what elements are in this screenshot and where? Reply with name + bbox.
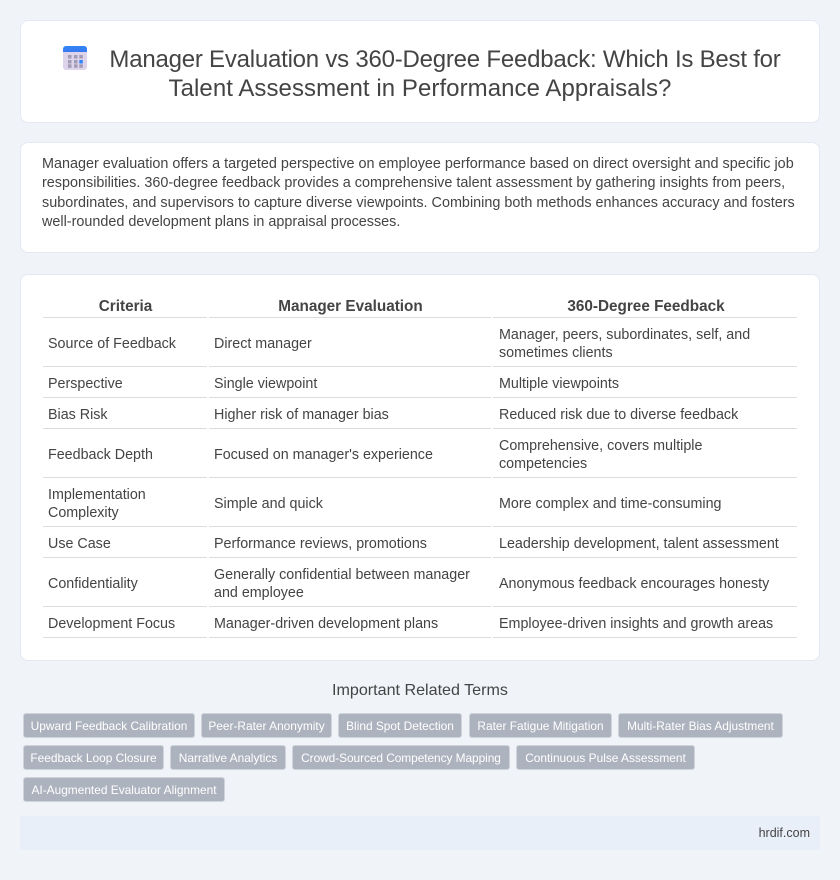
row: source of feedback: sometimes clients [499, 345, 613, 361]
tag: Continuous Pulse Assessment [525, 751, 686, 765]
tag [23, 777, 225, 802]
icon: calendar [63, 46, 87, 70]
row: implementation complexity [48, 487, 722, 521]
tag [338, 713, 462, 738]
tag [201, 713, 332, 738]
panel: intro text [20, 142, 820, 253]
row: development focus: Manager-driven development plans [214, 616, 438, 632]
title: Talent Assessment in Performance Appraisals? [169, 75, 671, 102]
panel: comparison table [20, 274, 820, 661]
row: perspective: Single viewpoint [214, 376, 317, 392]
row: source of feedback: Direct manager [214, 336, 312, 352]
row: confidentiality [48, 567, 770, 601]
intro paragraph: Manager evaluation offers a targeted perspective on employee performance based on direct oversight and specific job [42, 156, 794, 172]
tag: Upward Feedback Calibration [31, 719, 187, 733]
tag: Blind Spot Detection [346, 719, 454, 733]
row: perspective: Multiple viewpoints [499, 376, 619, 392]
row: use case: Use Case [48, 536, 111, 552]
row: source of feedback: Source of Feedback [48, 336, 176, 352]
table header: 360-degree feedback: 360-Degree Feedback [567, 298, 725, 315]
tag: Feedback Loop Closure [30, 751, 157, 765]
row: implementation complexity: Complexity [48, 505, 119, 521]
tag [618, 713, 783, 738]
row: development focus: Development Focus [48, 616, 175, 632]
footer bar [20, 816, 820, 850]
title: Manager Evaluation vs 360-Degree Feedback: Which Is Best for [109, 46, 781, 73]
row: confidentiality: Anonymous feedback encourages honesty [499, 576, 769, 592]
row: perspective: Perspective [48, 376, 123, 392]
row: implementation complexity: Implementation [48, 487, 146, 503]
row: bias risk [48, 407, 738, 423]
row: use case: Leadership development, talent assessment [499, 536, 779, 552]
row: implementation complexity: More complex and time-consuming [499, 496, 722, 512]
tag [292, 745, 510, 770]
row: implementation complexity: Simple and quick [214, 496, 323, 512]
tag [23, 745, 164, 770]
row: feedback depth: Comprehensive, covers multiple [499, 438, 702, 454]
row: development focus: Employee-driven insights and growth areas [499, 616, 773, 632]
row: bias risk: Higher risk of manager bias [214, 407, 389, 423]
tag [23, 713, 195, 738]
row: confidentiality: Confidentiality [48, 576, 138, 592]
row: feedback depth: Feedback Depth [48, 447, 153, 463]
table grid lines [43, 317, 797, 638]
row: feedback depth: Focused on manager's experience [214, 447, 433, 463]
row: confidentiality: and employee [214, 585, 304, 601]
row: feedback depth [48, 438, 702, 472]
row: source of feedback: Manager, peers, subordinates, self, and [499, 327, 750, 343]
intro paragraph: responsibilities. 360-degree feedback provides a comprehensive talent assessment by gathering insights from peers, [42, 175, 785, 191]
tag: Multi-Rater Bias Adjustment [627, 719, 774, 733]
heading: important related terms: Important Related Terms [332, 681, 508, 699]
row: development focus [48, 616, 773, 632]
tag: AI-Augmented Evaluator Alignment [31, 783, 217, 797]
footer source: hrdif.com [759, 826, 810, 840]
row: perspective [48, 376, 619, 392]
row: confidentiality: Generally confidential between manager [214, 567, 470, 583]
table header: manager evaluation: Manager Evaluation [278, 298, 423, 315]
row: source of feedback [48, 327, 750, 361]
intro paragraph: well-rounded development plans in appraisal processes. [42, 214, 400, 230]
intro paragraph [42, 156, 795, 230]
tag [469, 713, 612, 738]
row: bias risk: Reduced risk due to diverse feedback [499, 407, 738, 423]
tag: Narrative Analytics [179, 751, 277, 765]
row: use case [48, 536, 779, 552]
panel: header [20, 20, 820, 123]
tag [170, 745, 286, 770]
tag list [23, 713, 783, 802]
intro paragraph: subordinates, and supervisors to capture diverse viewpoints. Combining both methods enhances accuracy and fosters [42, 195, 795, 211]
tag: Crowd-Sourced Competency Mapping [301, 751, 501, 765]
tag: Rater Fatigue Mitigation [477, 719, 604, 733]
row: bias risk: Bias Risk [48, 407, 108, 423]
title [109, 46, 781, 102]
table header: criteria: Criteria [99, 298, 152, 315]
tag: Peer-Rater Anonymity [208, 719, 325, 733]
row: use case: Performance reviews, promotions [214, 536, 427, 552]
tag [516, 745, 695, 770]
row: feedback depth: competencies [499, 456, 587, 472]
